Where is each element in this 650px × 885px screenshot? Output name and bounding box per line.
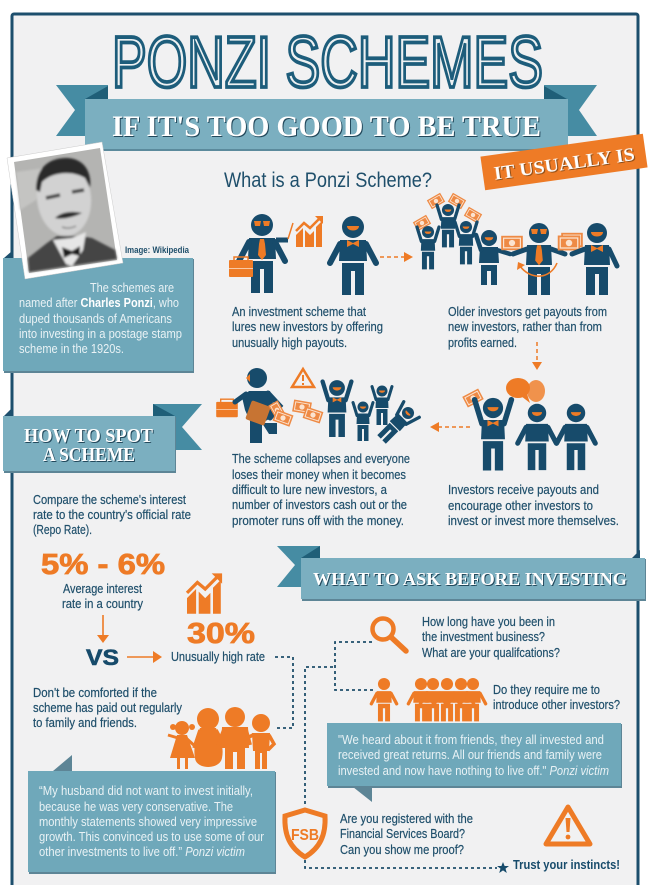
quote panel: husband <box>28 755 276 874</box>
average rate label <box>62 581 143 611</box>
question: how long: What are your qualifcations? <box>422 645 560 660</box>
question: registered: Financial Services Board? <box>340 826 465 841</box>
compare rates text: rate to the country's official rate <box>33 507 191 522</box>
icon: FSB shield <box>285 810 325 857</box>
question: introduce others: introduce other investors? <box>493 697 620 712</box>
step 4 text: The scheme collapses and everyone <box>232 451 410 466</box>
step 1 text: unusually high payouts. <box>232 335 347 350</box>
step 2: older investors paid <box>413 193 617 295</box>
icon: person and group <box>371 678 486 721</box>
step 1 text: lures new investors by offering <box>232 319 383 334</box>
step 2 text: profits earned. <box>448 335 517 350</box>
arrow: step 2 to 3 <box>532 342 542 370</box>
quote panel: friends: received great returns. All our friends and family were <box>338 747 602 762</box>
step 3: investors encourage others <box>462 378 595 471</box>
step 4 text: number of investors cash out or the <box>232 497 407 512</box>
average rate label: rate in a country <box>62 596 143 611</box>
question: registered: Are you registered with the <box>340 811 473 826</box>
arrow: down to vs <box>97 615 109 643</box>
info panel: charles ponzi <box>3 251 194 373</box>
section banner: what to ask before investing <box>277 546 646 601</box>
step 2 text <box>448 304 607 350</box>
step 2 text: new investors, rather than from <box>448 319 602 334</box>
icon: warning triangle <box>546 807 590 844</box>
step 3 text <box>448 482 619 528</box>
step 4: promoter runs off, investors panic <box>216 368 420 447</box>
heading: what is a ponzi scheme: What is a Ponzi Scheme? <box>224 169 432 192</box>
quote panel: husband: because he was very conservative. The <box>39 799 233 814</box>
info panel: charles ponzi: duped thousands of Americans <box>19 311 172 326</box>
family comfort text: scheme has paid out regularly <box>33 700 182 715</box>
orange badge: it usually is: IT USUALLY IS <box>493 144 636 185</box>
step 1 text: An investment scheme that <box>232 304 366 319</box>
step 1 text <box>232 304 383 350</box>
step 3 text: encourage other investors to <box>448 498 593 513</box>
arrow: step 1 to 2 <box>380 252 413 262</box>
photo credit: Image: Wikipedia <box>125 245 190 255</box>
step 4 text <box>232 451 410 528</box>
section banner: what to ask before investing: WHAT TO ASK BEFORE INVESTING <box>313 569 627 589</box>
statistic: 5% - 6%: 5% - 6% <box>41 549 165 581</box>
subtitle: IF IT'S TOO GOOD TO BE TRUE <box>112 110 541 143</box>
compare rates text <box>33 492 191 537</box>
info panel: charles ponzi: named after Charles Ponzi, who <box>19 295 179 310</box>
info panel: charles ponzi: into investing in a postage stamp <box>19 326 182 341</box>
quote panel: husband: growth. This convinced us to use some of our <box>39 829 265 844</box>
quote panel: friends: invested and now have nothing to live off." Ponzi victim <box>338 763 609 778</box>
section banner: how to spot a scheme: HOW TO SPOT <box>24 425 154 447</box>
question: how long: the investment business? <box>422 629 545 644</box>
question: how long <box>422 614 560 660</box>
question: how long: How long have you been in <box>422 614 555 629</box>
family comfort text <box>33 685 182 730</box>
step 4 text: promoter runs off with the money. <box>232 513 404 528</box>
high rate label: Unusually high rate <box>171 649 265 664</box>
statistic: 30%: 30% <box>187 618 255 650</box>
compare rates text: Compare the scheme's interest <box>33 492 186 507</box>
section banner: how to spot a scheme <box>3 404 202 473</box>
section banner: how to spot a scheme: A SCHEME <box>43 444 135 466</box>
quote panel: husband: monthly statements showed very impressive <box>39 814 257 829</box>
icon: star <box>497 862 509 873</box>
icon: magnifying glass <box>372 618 406 651</box>
quote panel: friends <box>327 723 622 802</box>
dashed connector lines <box>275 642 497 868</box>
arrow: step 3 to 4 <box>430 422 470 432</box>
callout: trust your instincts: Trust your instincts! <box>513 857 620 872</box>
question: introduce others <box>493 682 620 712</box>
info panel: charles ponzi: The schemes are <box>90 280 174 295</box>
info panel: charles ponzi: scheme in the 1920s. <box>19 341 124 356</box>
step 3 text: invest or invest more themselves. <box>448 513 619 528</box>
orange badge: it usually is <box>480 134 648 190</box>
family comfort text: Don't be comforted if the <box>33 685 157 700</box>
quote panel: husband: “My husband did not want to invest initially, <box>39 783 253 798</box>
family comfort text: to family and friends. <box>33 715 137 730</box>
step 1: promoter and investor <box>229 214 376 295</box>
question: introduce others: Do they require me to <box>493 682 600 697</box>
subtitle ribbon <box>56 85 597 151</box>
icon: FSB shield: FSB <box>291 827 319 844</box>
question: registered <box>340 811 473 857</box>
portrait photo of Charles Ponzi <box>7 142 123 279</box>
quote panel: friends: "We heard about it from friends, they all invested and <box>338 732 604 747</box>
step 2 text: Older investors get payouts from <box>448 304 607 319</box>
question: registered: Can you show me proof? <box>340 842 464 857</box>
vs label: VS <box>86 645 119 670</box>
icon: family <box>168 707 274 769</box>
average rate label: Average interest <box>63 581 142 596</box>
arrow: vs to high rate <box>127 651 162 663</box>
step 3 text: Investors receive payouts and <box>448 482 599 497</box>
quote panel: husband: other investments to live off.” Ponzi victim <box>39 844 245 859</box>
step 4 text: difficult to lure new investors, a <box>232 482 388 497</box>
step 4 text: loses their money when it becomes <box>232 467 406 482</box>
icon: rising chart <box>187 573 222 614</box>
compare rates text: (Repo Rate). <box>33 522 92 537</box>
